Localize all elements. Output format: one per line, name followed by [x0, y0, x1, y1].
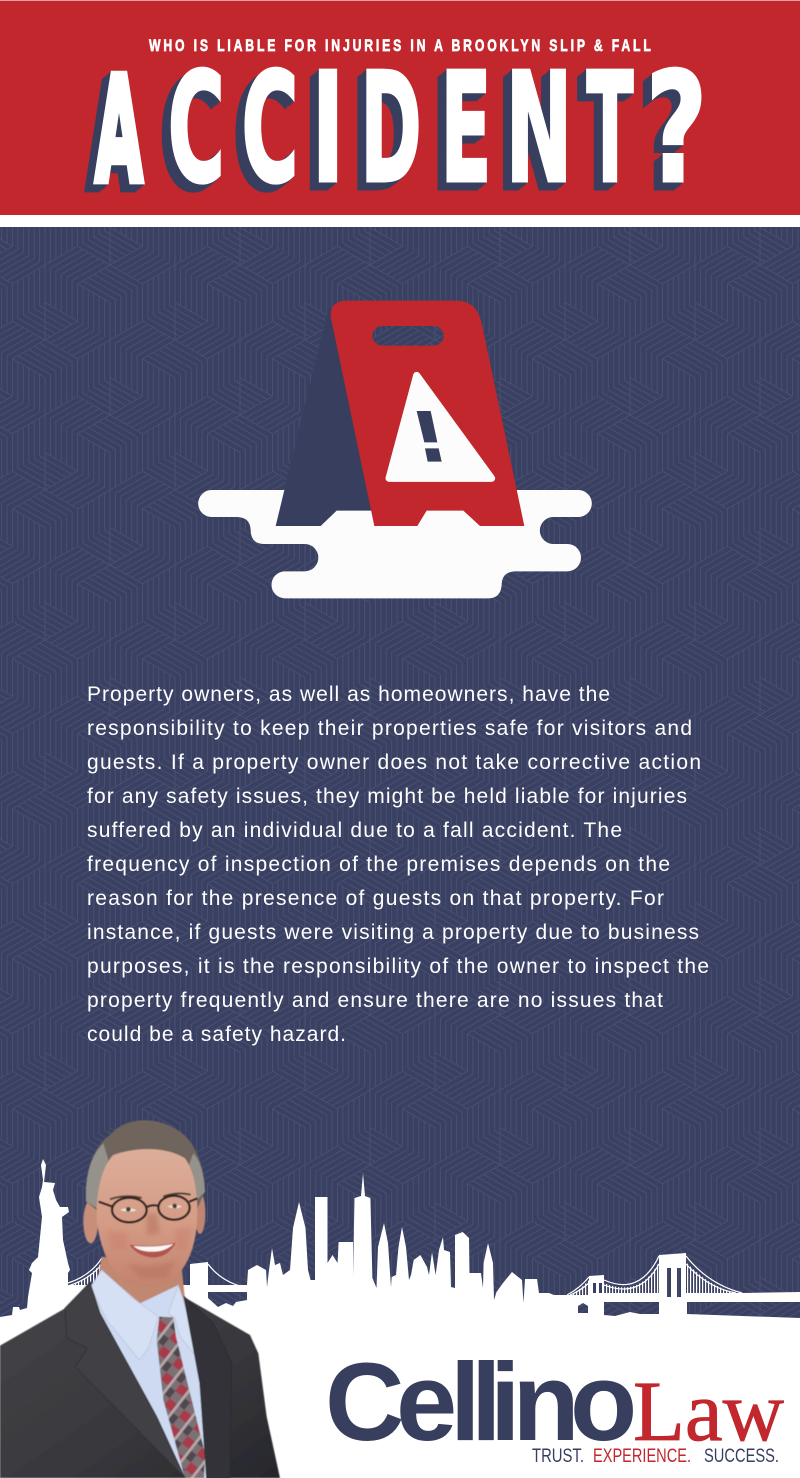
- title: ACCIDENT?: C: [168, 41, 225, 217]
- tagline: [532, 1446, 779, 1467]
- shirt: [91, 1270, 206, 1478]
- tagline: EXPERIENCE.: [593, 1446, 691, 1467]
- title: ACCIDENT?: [95, 39, 707, 218]
- body paragraph: Property owners, as well as homeowners, have the: [87, 683, 610, 706]
- icon: wet floor sign in puddle: [198, 301, 592, 598]
- red header banner: [0, 0, 800, 218]
- ears: [83, 1200, 98, 1243]
- title: ACCIDENT?: D: [360, 41, 422, 218]
- suit jacket: [0, 1282, 280, 1478]
- tagline: TRUST.: [532, 1446, 584, 1467]
- body paragraph: responsibility to keep their properties safe for visitors and: [87, 717, 692, 740]
- attorney portrait: [0, 1120, 280, 1478]
- left lapel: [65, 1283, 185, 1478]
- logo wordmark Cellino: Cellino: [325, 1341, 637, 1464]
- eyebrows: [110, 1193, 191, 1199]
- title: ACCIDENT?: I: [312, 41, 344, 218]
- puddle: [198, 490, 592, 598]
- exclamation mark: [417, 411, 442, 462]
- title: ACCIDENT?: ?: [646, 39, 707, 217]
- body paragraph: for any safety issues, they might be held liable for injuries: [87, 785, 687, 808]
- body paragraph: [87, 683, 709, 1046]
- tagline: SUCCESS.: [704, 1446, 779, 1467]
- bridge cables: [68, 1256, 742, 1295]
- hair: [86, 1120, 205, 1210]
- neck: [97, 1257, 185, 1320]
- sign front panel: [331, 301, 524, 526]
- New York skyline silhouette: [0, 1159, 800, 1478]
- body paragraph: property frequently and ensure there are no issues that: [87, 989, 663, 1012]
- smile: [129, 1243, 176, 1258]
- right lapel: [184, 1297, 232, 1478]
- title: ACCIDENT?: A: [95, 47, 143, 215]
- logo: Cellino Law: [325, 1341, 784, 1467]
- body paragraph: frequency of inspection of the premises depends on the: [87, 853, 670, 876]
- glasses: [99, 1196, 197, 1222]
- title: ACCIDENT?: N: [506, 40, 572, 217]
- title: ACCIDENT?: T: [586, 39, 634, 217]
- body paragraph: instance, if guests were visiting a property due to business: [87, 921, 699, 944]
- face: [97, 1149, 197, 1286]
- cheeks: [107, 1227, 192, 1250]
- subtitle: WHO IS LIABLE FOR INJURIES IN A BROOKLYN SLIP & FALL: [149, 37, 651, 56]
- warning triangle: [389, 375, 492, 478]
- tie: [157, 1317, 205, 1478]
- body paragraph: could be a safety hazard.: [87, 1023, 346, 1046]
- body paragraph: guests. If a property owner does not take corrective action: [87, 751, 701, 774]
- body paragraph: suffered by an individual due to a fall accident. The: [87, 819, 622, 842]
- body paragraph: reason for the presence of guests on that property. For: [87, 887, 664, 910]
- collar: [91, 1270, 195, 1360]
- body paragraph: purposes, it is the responsibility of the owner to inspect the: [87, 955, 709, 978]
- sign back panel: [276, 308, 377, 526]
- eyes: [120, 1205, 182, 1212]
- title: ACCIDENT?: C: [241, 41, 299, 217]
- face shading: [127, 1213, 177, 1278]
- title: ACCIDENT?: E: [440, 41, 492, 218]
- logo wordmark Law: Law: [633, 1363, 784, 1459]
